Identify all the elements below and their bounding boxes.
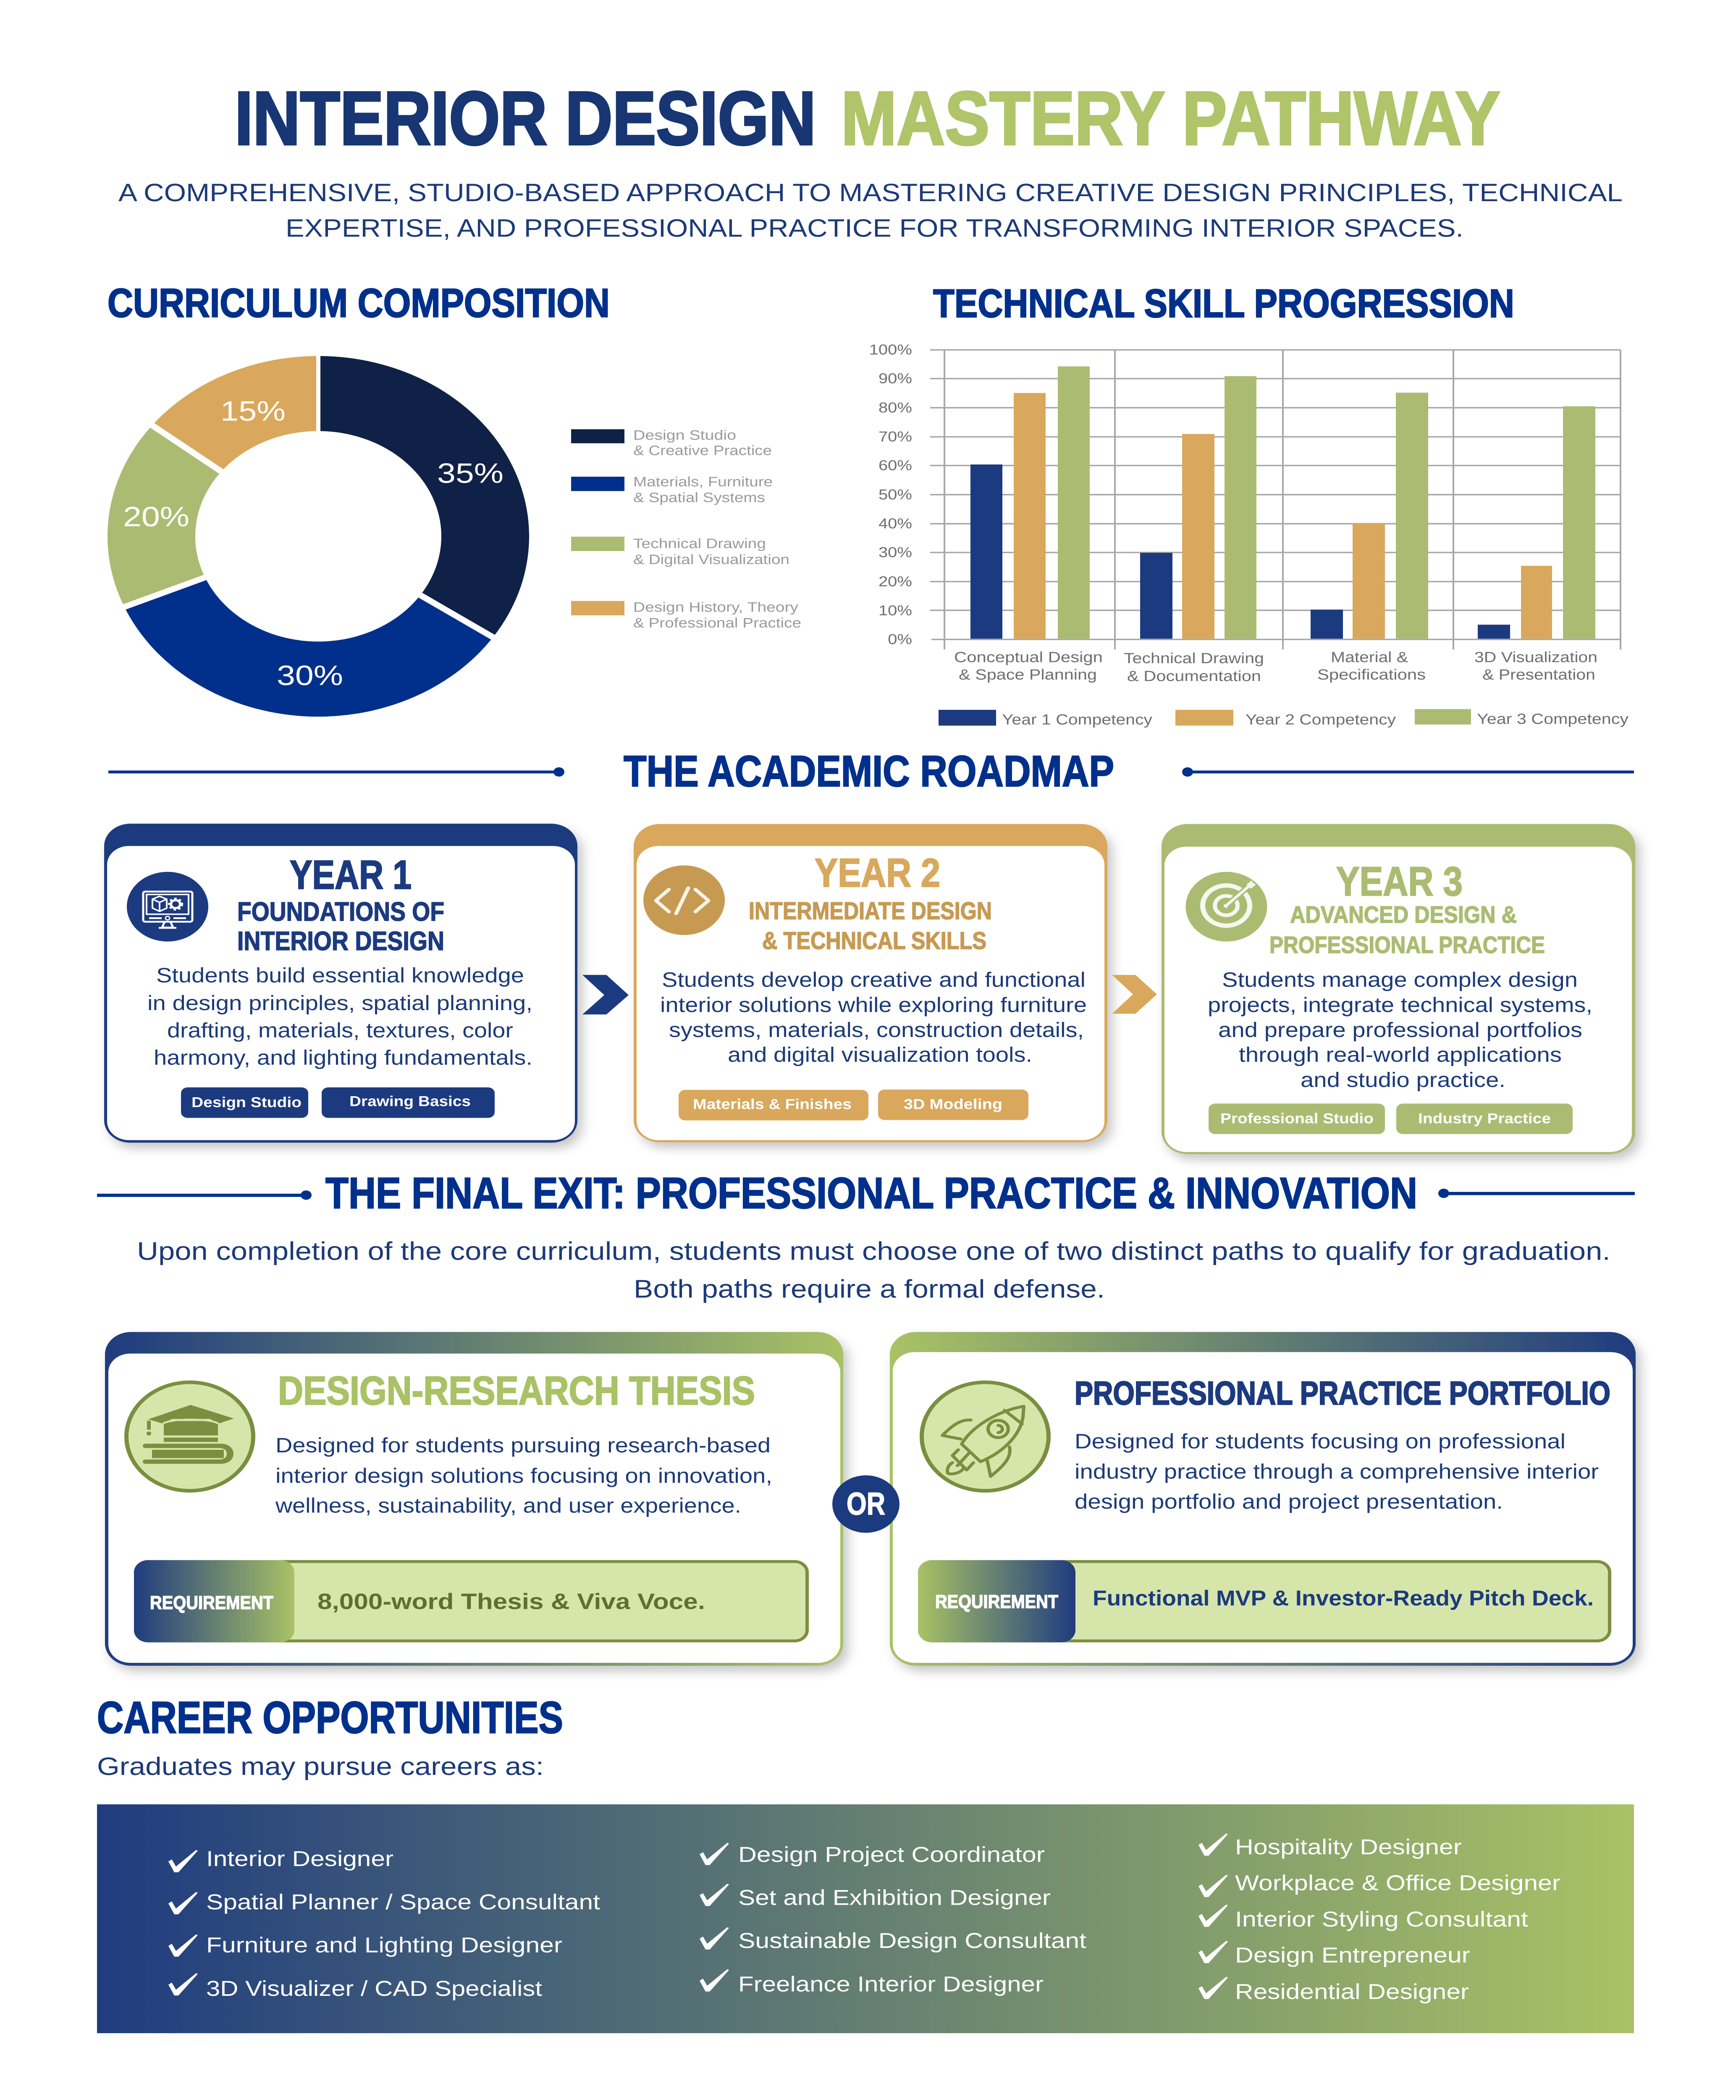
thesis title: DESIGN-RESEARCH THESIS [278, 1368, 755, 1413]
y-axis labels: 50% [878, 487, 912, 503]
year 3 description: Students manage complex design [1222, 968, 1578, 992]
x-axis labels: Technical Drawing [1124, 650, 1264, 667]
icon: rocket [922, 1382, 1049, 1491]
y-axis labels: 70% [878, 429, 912, 445]
donut chart: 15% [220, 395, 286, 427]
portfolio description: Designed for students focusing on professional [1075, 1430, 1566, 1453]
heading: career opportunities: CAREER OPPORTUNITIES [97, 1693, 563, 1743]
tag: drawing basics: Drawing Basics [349, 1093, 471, 1109]
year 2 subtitle [749, 898, 992, 954]
thesis requirement: 8,000-word Thesis & Viva Voce. [317, 1589, 705, 1614]
bars: 3D visualization [1478, 406, 1595, 639]
thesis description: Designed for students pursuing research-based [275, 1433, 771, 1457]
final exit description: Both paths require a formal defense. [634, 1275, 1105, 1303]
x-axis labels: & Space Planning [959, 667, 1097, 683]
year 2 subtitle: INTERMEDIATE DESIGN [749, 898, 992, 925]
y-axis labels: 10% [878, 603, 912, 619]
tag: materials and finishes [679, 1090, 868, 1121]
thesis requirement [134, 1560, 807, 1642]
career column 1: Interior Designer [206, 1847, 393, 1871]
tag: materials and finishes: Materials & Finishes [693, 1096, 852, 1112]
career column 2: Sustainable Design Consultant [738, 1929, 1086, 1953]
donut legend: & Professional Practice [633, 616, 801, 631]
year 1 label: YEAR 1 [290, 852, 412, 898]
year 3 subtitle [1269, 901, 1545, 958]
year 3 description: and studio practice. [1301, 1068, 1505, 1092]
section heading: academic roadmap [108, 747, 1634, 795]
thesis requirement: REQUIREMENT [150, 1592, 273, 1613]
donut legend: Design Studio [633, 428, 736, 443]
portfolio description [1075, 1430, 1599, 1513]
heading: curriculum composition: CURRICULUM COMPOSITION [108, 280, 610, 326]
title: INTERIOR DESIGN [235, 76, 816, 160]
year 2 description: Students develop creative and functional [662, 968, 1086, 992]
career column 2: Freelance Interior Designer [738, 1972, 1044, 1996]
panel: design-research thesis [105, 1332, 843, 1666]
chart legend: Year 1 Competency [1002, 711, 1152, 728]
year 1 description: Students build essential knowledge [156, 964, 524, 987]
year 1 description: harmony, and lighting fundamentals. [154, 1046, 532, 1069]
donut legend: Design History, Theory [633, 600, 798, 615]
tag: industry practice [1396, 1103, 1573, 1134]
year 2 description: and digital visualization tools. [728, 1043, 1032, 1066]
career column 1: Spatial Planner / Space Consultant [206, 1890, 600, 1914]
icon: code brackets [643, 865, 725, 935]
year 1 subtitle: INTERIOR DESIGN [237, 926, 444, 956]
year 3 subtitle: ADVANCED DESIGN & [1290, 901, 1517, 928]
portfolio description: design portfolio and project presentation. [1075, 1490, 1503, 1513]
portfolio requirement [918, 1560, 1610, 1642]
career column 2: Design Project Coordinator [738, 1843, 1045, 1866]
donut chart: 35% [437, 457, 503, 489]
year 1 subtitle: FOUNDATIONS OF [237, 897, 444, 927]
career intro: Graduates may pursue careers as: [97, 1752, 544, 1780]
tag: drawing basics [322, 1087, 495, 1118]
chart legend: Year 2 Competency [1246, 711, 1396, 728]
final exit description [137, 1237, 1610, 1303]
arrow: year 2 to year 3 [1112, 975, 1157, 1014]
year 1 description [147, 964, 532, 1069]
x-axis labels: Specifications [1317, 667, 1426, 683]
chart legend [939, 709, 1628, 728]
y-axis labels [869, 342, 912, 647]
y-axis labels: 90% [878, 371, 912, 386]
year 3 description: and prepare professional portfolios [1218, 1018, 1582, 1042]
tag: 3D modeling: 3D Modeling [904, 1096, 1002, 1112]
career column 3: Workplace & Office Designer [1235, 1871, 1560, 1895]
tag: professional studio: Professional Studio [1220, 1111, 1374, 1126]
badge: OR [832, 1475, 899, 1533]
year 2 label: YEAR 2 [815, 850, 940, 895]
heading: technical skill progression: TECHNICAL SKILL PROGRESSION [933, 281, 1514, 326]
career column 2 [700, 1843, 1086, 1996]
x-axis labels: & Documentation [1127, 668, 1261, 684]
title: MASTERY PATHWAY [841, 76, 1500, 160]
subtitle: A COMPREHENSIVE, STUDIO-BASED APPROACH TO MASTERING CREATIVE DESIGN PRINCIPLES, TECHNICAL [118, 178, 1623, 207]
subtitle: EXPERTISE, AND PROFESSIONAL PRACTICE FOR TRANSFORMING INTERIOR SPACES. [286, 214, 1463, 242]
donut chart: 30% [277, 659, 343, 691]
y-axis labels: 100% [869, 342, 912, 358]
career column 3: Design Entrepreneur [1235, 1943, 1470, 1967]
x-axis labels: & Presentation [1482, 667, 1595, 683]
career column 2: Set and Exhibition Designer [738, 1885, 1051, 1910]
thesis description: wellness, sustainability, and user experience. [275, 1494, 741, 1517]
bars: technical drawing [1140, 376, 1256, 639]
panel: year 2 [634, 824, 1107, 1142]
final exit description: Upon completion of the core curriculum, students must choose one of two distinct paths to qualify for graduation. [137, 1237, 1610, 1265]
career column 1: 3D Visualizer / CAD Specialist [206, 1977, 542, 2000]
career column 3 [1198, 1833, 1560, 2004]
tag: design studio: Design Studio [191, 1095, 302, 1110]
y-axis labels: 40% [878, 516, 912, 532]
x-axis labels: Conceptual Design [954, 649, 1103, 665]
panel: professional practice portfolio [890, 1332, 1636, 1666]
year 1 subtitle [237, 897, 444, 956]
arrow: year 1 to year 2 [582, 975, 629, 1014]
donut chart [108, 354, 529, 717]
tag: 3D modeling [878, 1089, 1028, 1120]
y-axis labels: 30% [878, 545, 912, 560]
portfolio description: industry practice through a comprehensive interior [1075, 1460, 1599, 1483]
year 3 description [1208, 968, 1592, 1092]
donut legend: & Digital Visualization [633, 552, 789, 567]
icon: target with dart [1186, 872, 1267, 942]
x-axis labels [954, 649, 1597, 684]
year 1 description: drafting, materials, textures, color [167, 1019, 513, 1042]
bars: material and specifications [1311, 393, 1428, 639]
portfolio requirement: Functional MVP & Investor-Ready Pitch Deck. [1093, 1586, 1594, 1610]
donut chart: 20% [123, 501, 189, 533]
year 3 description: through real-world applications [1239, 1043, 1562, 1066]
panel: year 1 [104, 824, 577, 1143]
portfolio requirement: REQUIREMENT [935, 1591, 1058, 1612]
bar chart [869, 342, 1628, 728]
title [235, 76, 1500, 160]
tag: industry practice: Industry Practice [1418, 1111, 1551, 1126]
subtitle [118, 178, 1623, 242]
career column 3: Hospitality Designer [1235, 1835, 1462, 1859]
panel: career list [97, 1804, 1634, 2033]
bars: conceptual design [970, 366, 1090, 639]
icon: graduation cap and book [126, 1382, 253, 1491]
y-axis labels: 80% [878, 400, 912, 416]
y-axis labels: 20% [878, 574, 912, 590]
tag: professional studio [1209, 1103, 1385, 1134]
thesis description: interior design solutions focusing on innovation, [275, 1464, 772, 1488]
y-axis labels: 0% [888, 632, 912, 647]
icon: computer with cube and gear [127, 872, 208, 942]
panel: year 3 [1162, 824, 1635, 1154]
badge: OR: OR [847, 1486, 885, 1521]
year 3 subtitle: PROFESSIONAL PRACTICE [1269, 932, 1545, 958]
donut legend: Materials, Furniture [633, 475, 773, 490]
year 2 subtitle: & TECHNICAL SKILLS [762, 927, 986, 954]
year 3 label: YEAR 3 [1336, 859, 1463, 905]
thesis description [275, 1433, 772, 1517]
career column 1 [168, 1847, 600, 2000]
chart legend: Year 3 Competency [1477, 711, 1628, 727]
year 2 description: systems, materials, construction details, [669, 1018, 1084, 1042]
donut legend: Technical Drawing [633, 536, 766, 551]
donut legend: & Creative Practice [633, 443, 772, 458]
year 1 description: in design principles, spatial planning, [147, 992, 532, 1015]
y-axis labels: 60% [878, 458, 912, 473]
career column 3: Residential Designer [1235, 1979, 1469, 2004]
year 2 description: interior solutions while exploring furniture [660, 993, 1087, 1016]
career column 3: Interior Styling Consultant [1235, 1907, 1528, 1931]
section heading: academic roadmap: THE ACADEMIC ROADMAP [624, 747, 1114, 795]
x-axis labels: 3D Visualization [1474, 649, 1597, 665]
x-axis labels: Material & [1331, 649, 1408, 665]
year 2 description [660, 968, 1087, 1066]
career column 1: Furniture and Lighting Designer [206, 1933, 562, 1957]
donut legend: & Spatial Systems [633, 490, 765, 505]
donut legend [571, 428, 801, 631]
tag: design studio [181, 1087, 308, 1118]
year 3 description: projects, integrate technical systems, [1208, 993, 1592, 1016]
